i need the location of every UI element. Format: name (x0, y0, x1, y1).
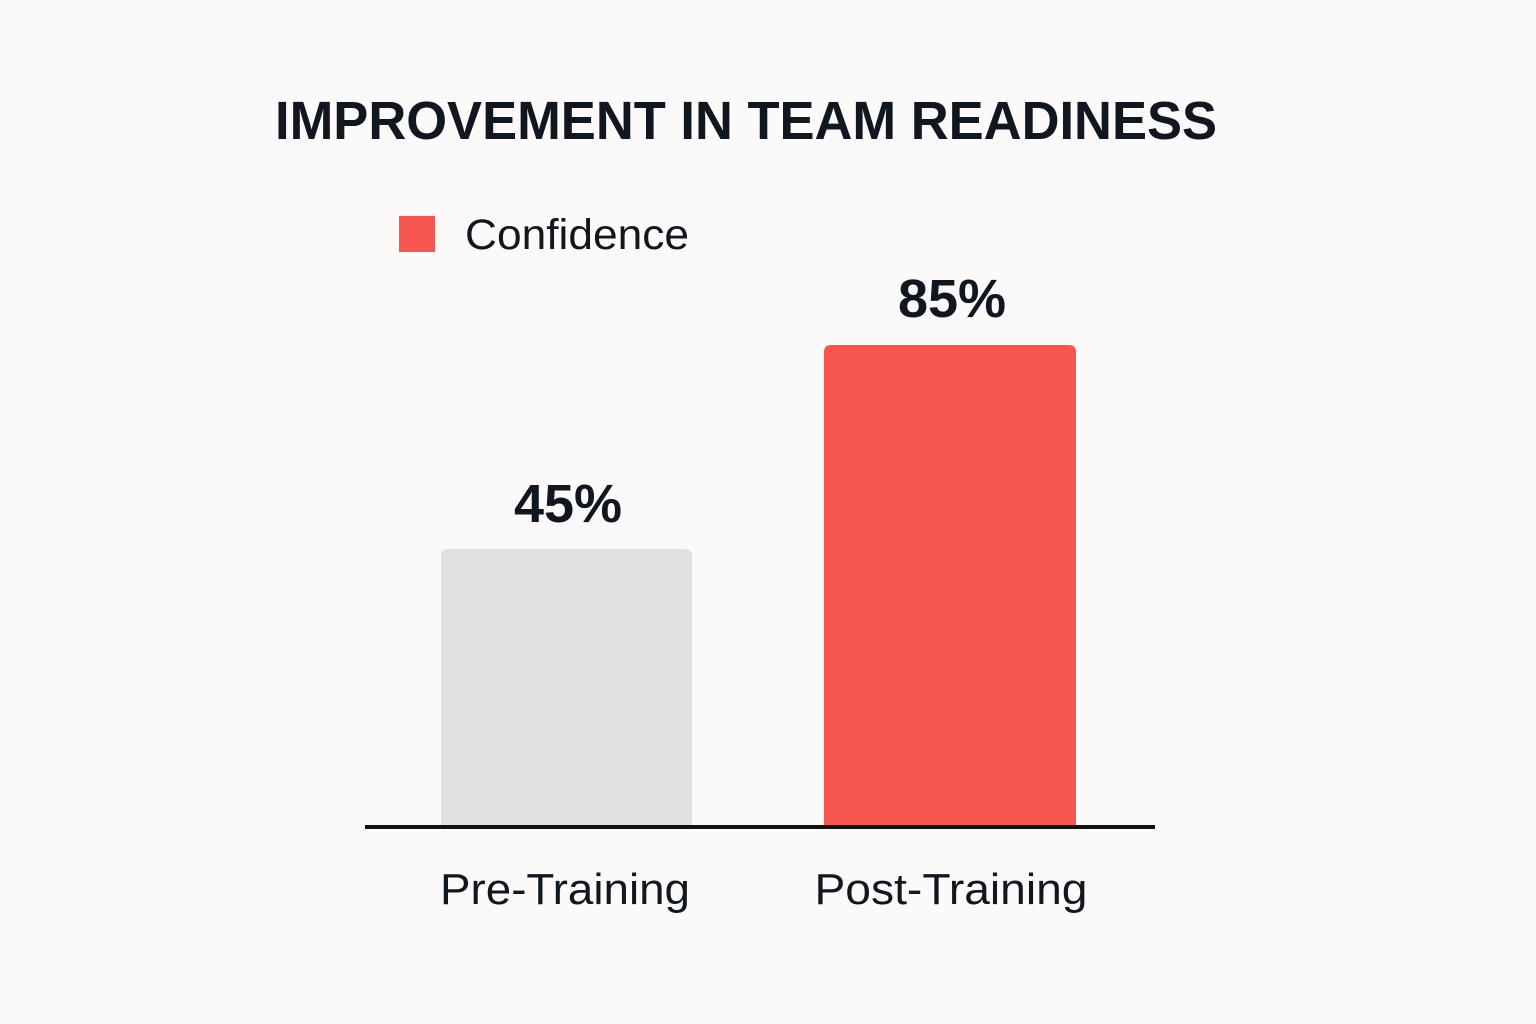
x axis (365, 825, 1155, 829)
category label: Post-Training: Post-Training (814, 865, 1088, 914)
legend label: Confidence (465, 211, 689, 259)
legend swatch (399, 216, 435, 252)
category label: Pre-Training: Pre-Training (440, 865, 690, 914)
legend (399, 211, 689, 259)
value label 45%: 45% (514, 474, 622, 534)
title: IMPROVEMENT IN TEAM READINESS (275, 91, 1217, 151)
value label 85%: 85% (898, 269, 1006, 329)
bar: pre-training (441, 474, 692, 826)
bar: post-training (824, 269, 1076, 826)
